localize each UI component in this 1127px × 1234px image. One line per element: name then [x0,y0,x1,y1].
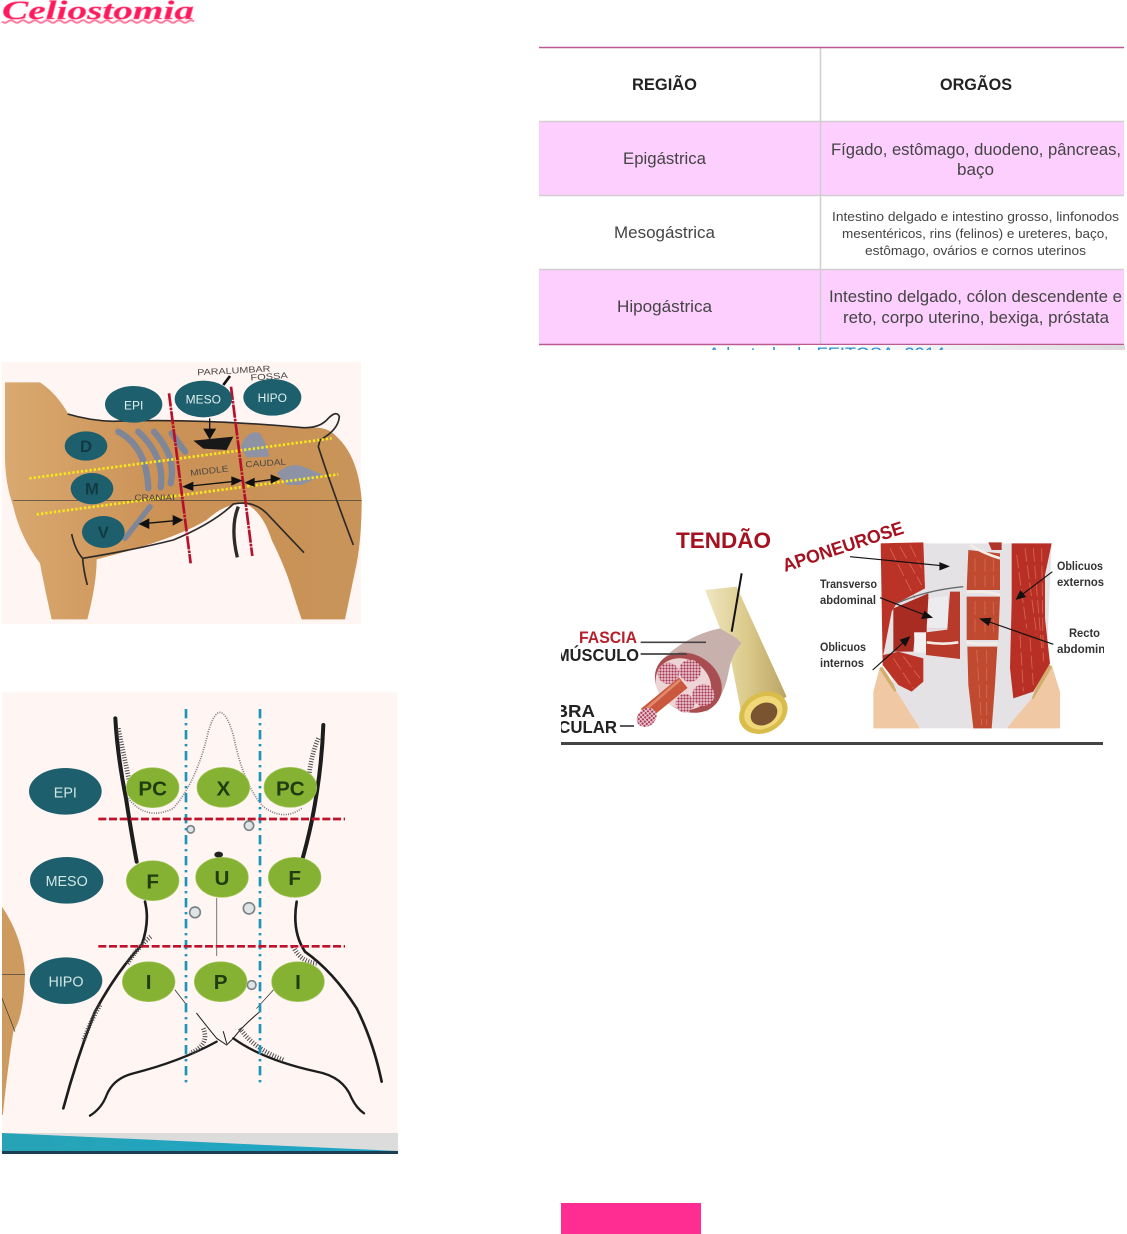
table organ lists: reto, corpo uterino, bexiga, próstata [843,309,1110,327]
rectus upper tip [988,542,1002,550]
muscle names: externos [1057,575,1104,589]
tendon cut end [739,691,788,734]
region ellipse labels [124,391,287,412]
side ellipse labels: M [85,480,99,499]
organ ellipses [122,767,324,1002]
ribs [118,432,185,538]
muscle names: Recto [1069,626,1100,640]
torso muscle illustration [850,542,1060,728]
table: regions and organs [539,47,1124,345]
illustration baseline rule [561,742,1103,745]
label: músculo: MÚSCULO [556,644,639,665]
horizontal reference line [13,499,362,501]
fascicles [658,660,714,713]
table row: Hipogástrica background [539,270,1124,344]
double arrows [140,376,279,528]
table region names: Epigástrica [623,150,707,168]
external oblique right [1010,543,1052,698]
dotted ribcage contour [128,712,302,815]
table organ lists: baço [957,161,994,179]
red cranial and caudal dividers [169,387,252,563]
table header: REGIÃO [632,74,697,94]
muscle names [820,559,1115,670]
panel: ventral abdomen regions [2,692,397,1133]
region ellipses [29,768,103,1004]
transverse aponeurosis patch [927,596,948,628]
umbilicus [214,852,223,858]
region ellipse labels: EPI [124,398,143,412]
pink footer block [561,1203,701,1234]
region ellipse labels: EPI [54,785,77,801]
horse body [5,382,362,619]
label: tendão: TENDÃO [676,528,771,553]
white patch lower [914,632,926,652]
pointer arrows [850,557,1053,670]
blue vertical dividers [186,709,260,1085]
organ ellipse letters: X [216,777,230,800]
table organ lists: estômago, ovários e cornos uterinos [865,243,1087,258]
yellow dorsal and ventral dividers [29,438,338,514]
anatomical labels [134,364,288,503]
body outline [63,718,382,1116]
white tendon bands [927,545,1000,644]
tendon pointer [732,573,742,632]
anatomical labels: CAUDAL [245,457,287,469]
organ ellipse letters: PC [138,778,167,801]
cropped horse leg at left edge [2,907,25,1123]
label: fibra muscular: MUSCULAR [521,717,617,737]
table row: Epigástrica background [539,122,1124,195]
muscle names: Transverso [820,577,877,591]
table header [632,74,1012,94]
external oblique left [881,542,925,692]
label: fibra muscular: FIBRA [538,701,595,721]
aponeurosis base [882,543,1052,728]
region ellipse labels: MESO [46,874,88,890]
table region names [614,150,716,316]
table region names: Mesogástrica [614,224,716,242]
region ellipses [65,379,301,548]
region ellipse labels [46,785,88,990]
transverse muscle [926,592,960,659]
organ ellipse letters: F [146,871,159,894]
muscle fiber [645,683,683,714]
fiber highlight [645,680,680,710]
organ ellipse letters [138,777,305,994]
nipples [187,821,256,989]
tendon cylinder [705,587,787,723]
table organ lists: mesentéricos, rins (felinos) e ureteres, baço, [842,226,1108,241]
muscle names: internos [820,656,864,670]
side ellipse labels: V [98,523,109,542]
skin at hips [873,665,1060,728]
anatomical labels: FOSSA [250,370,288,383]
fur hatching [83,728,318,1060]
organ ellipse letters: I [295,971,301,994]
muscle names: abdominal [1057,642,1115,656]
muscle names: Oblicuos [1057,559,1103,573]
organ ellipse letters: F [288,867,301,890]
anatomical labels: CRANIAL [134,493,178,503]
label: fascia: FASCIA [579,628,637,647]
label: fibra muscular [561,705,617,733]
organ ellipse letters: U [215,867,229,890]
hip straps [881,666,1051,698]
organ shapes [193,432,323,485]
organ ellipse letters: I [146,971,152,994]
organ ellipse letters: PC [276,777,305,800]
table caption, clipped [712,345,1125,350]
rectus abdominis segments [967,550,1000,728]
region ellipse labels: MESO [186,393,221,407]
table caption, clipped: Adaptado de FEITOSA, 2014 [708,344,945,363]
muscle belly [654,652,722,713]
region ellipse labels: HIPO [258,391,287,405]
table region names: Hipogástrica [617,298,713,316]
red horizontal dividers [98,819,345,946]
fiber end [636,708,657,727]
muscle fibre hatching [890,545,1043,725]
table organ lists: Intestino delgado, cólon descendente e [829,288,1122,306]
internal oblique [893,593,948,652]
table organ lists: Intestino delgado e intestino grosso, linfonodos [832,209,1120,224]
panel: horse lateral abdomen regions [2,362,362,624]
fascia [660,628,742,712]
anatomical labels: MIDDLE [190,463,229,478]
table organ lists: Fígado, estômago, duodeno, pâncreas, [831,141,1121,159]
label: aponeurose: APONEUROSE [780,517,906,576]
table header: ORGÃOS [940,74,1012,94]
muscle names: Oblicuos [820,640,866,654]
body outlines [68,414,353,585]
leader lines [620,642,706,726]
panel: tendon and aponeurosis illustration [561,521,1104,745]
tendon and muscle bundle illustration [620,573,795,742]
region ellipse labels: HIPO [48,974,84,990]
muscle names: abdominal [820,593,876,607]
aponeurosis cut edge [897,587,963,603]
side ellipse labels: D [80,437,92,456]
organ ellipse letters: P [214,971,228,994]
table organ lists [829,141,1122,327]
anatomical labels: PARALUMBAR [197,364,271,377]
slide footer bar [2,1133,398,1154]
side ellipse labels [80,437,109,542]
